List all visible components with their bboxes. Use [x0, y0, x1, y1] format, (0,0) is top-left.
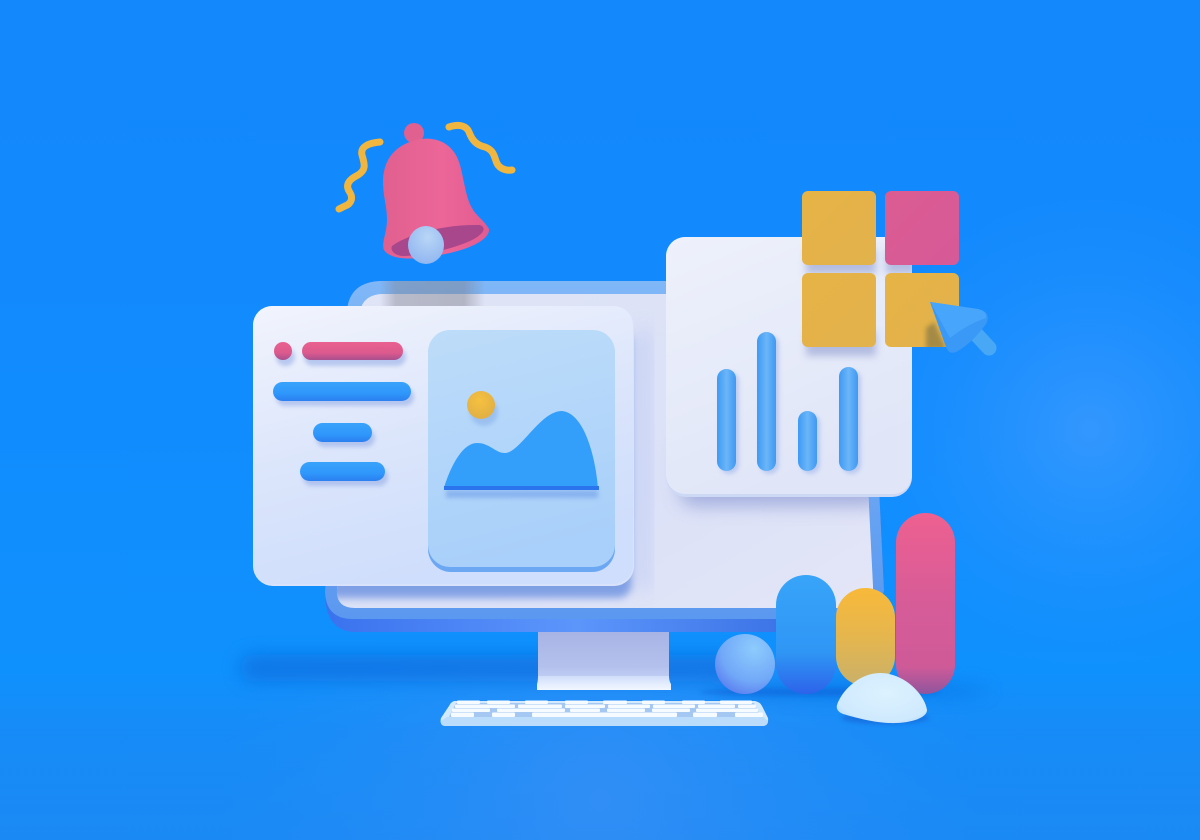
- sun shadow: [470, 398, 498, 426]
- text line: long blue bar: [273, 382, 411, 401]
- blue pill: [776, 575, 836, 694]
- yellow tile bottom left: [802, 273, 876, 347]
- squiggle left: [339, 142, 380, 209]
- keyboard base: [441, 701, 768, 726]
- monitor stand: [537, 630, 671, 690]
- cursor stem: [976, 334, 989, 348]
- monitor screen: [337, 294, 873, 608]
- keyboard: [441, 700, 768, 726]
- tile grid: [802, 191, 959, 356]
- bar 2: [757, 332, 776, 471]
- shadows on the screen: [320, 330, 885, 598]
- pink pill: [896, 513, 955, 694]
- mountain shadow: [446, 490, 598, 498]
- cursor shadow on tile: [926, 322, 946, 349]
- bell clapper: [408, 226, 444, 264]
- bell body: [383, 139, 489, 259]
- yellow tile top left: [802, 191, 876, 265]
- monitor frame face: [325, 281, 884, 619]
- icon: cursor arrow: [930, 302, 989, 353]
- cursor cone: [930, 302, 988, 353]
- monitor: [325, 281, 884, 690]
- image card: [428, 330, 615, 572]
- left panel: [253, 306, 634, 586]
- bell shadow on monitor: [380, 281, 485, 307]
- icon: mountains: [444, 411, 599, 490]
- ball: [715, 634, 775, 694]
- monitor frame base: [325, 281, 884, 632]
- bar shadows: [720, 335, 861, 474]
- pink tile: [885, 191, 959, 265]
- mouse: [837, 673, 927, 723]
- text line shadows: [276, 348, 414, 486]
- right chart panel: [666, 237, 912, 497]
- pill shadows: [700, 688, 940, 696]
- pill chart and objects: [700, 513, 955, 724]
- squiggle right: [449, 125, 512, 170]
- icon: sun: [467, 391, 495, 419]
- bell loop: [404, 123, 424, 143]
- bar 3: [798, 411, 817, 471]
- bar 4: [839, 367, 858, 471]
- keyboard bed: [449, 703, 761, 717]
- text line: red dot: [274, 342, 292, 360]
- keys: [451, 700, 763, 717]
- bell mouth: [391, 225, 484, 256]
- mouse shadow: [841, 712, 929, 724]
- floor shadow: [240, 655, 990, 696]
- text line: pink bar: [302, 342, 403, 360]
- text line: short blue bar: [313, 423, 372, 442]
- yellow tile bottom right: [885, 273, 959, 347]
- yellow pill: [836, 588, 895, 686]
- icon: bell: [339, 123, 512, 264]
- bar 1: [717, 369, 736, 471]
- text line: medium blue bar: [300, 462, 385, 481]
